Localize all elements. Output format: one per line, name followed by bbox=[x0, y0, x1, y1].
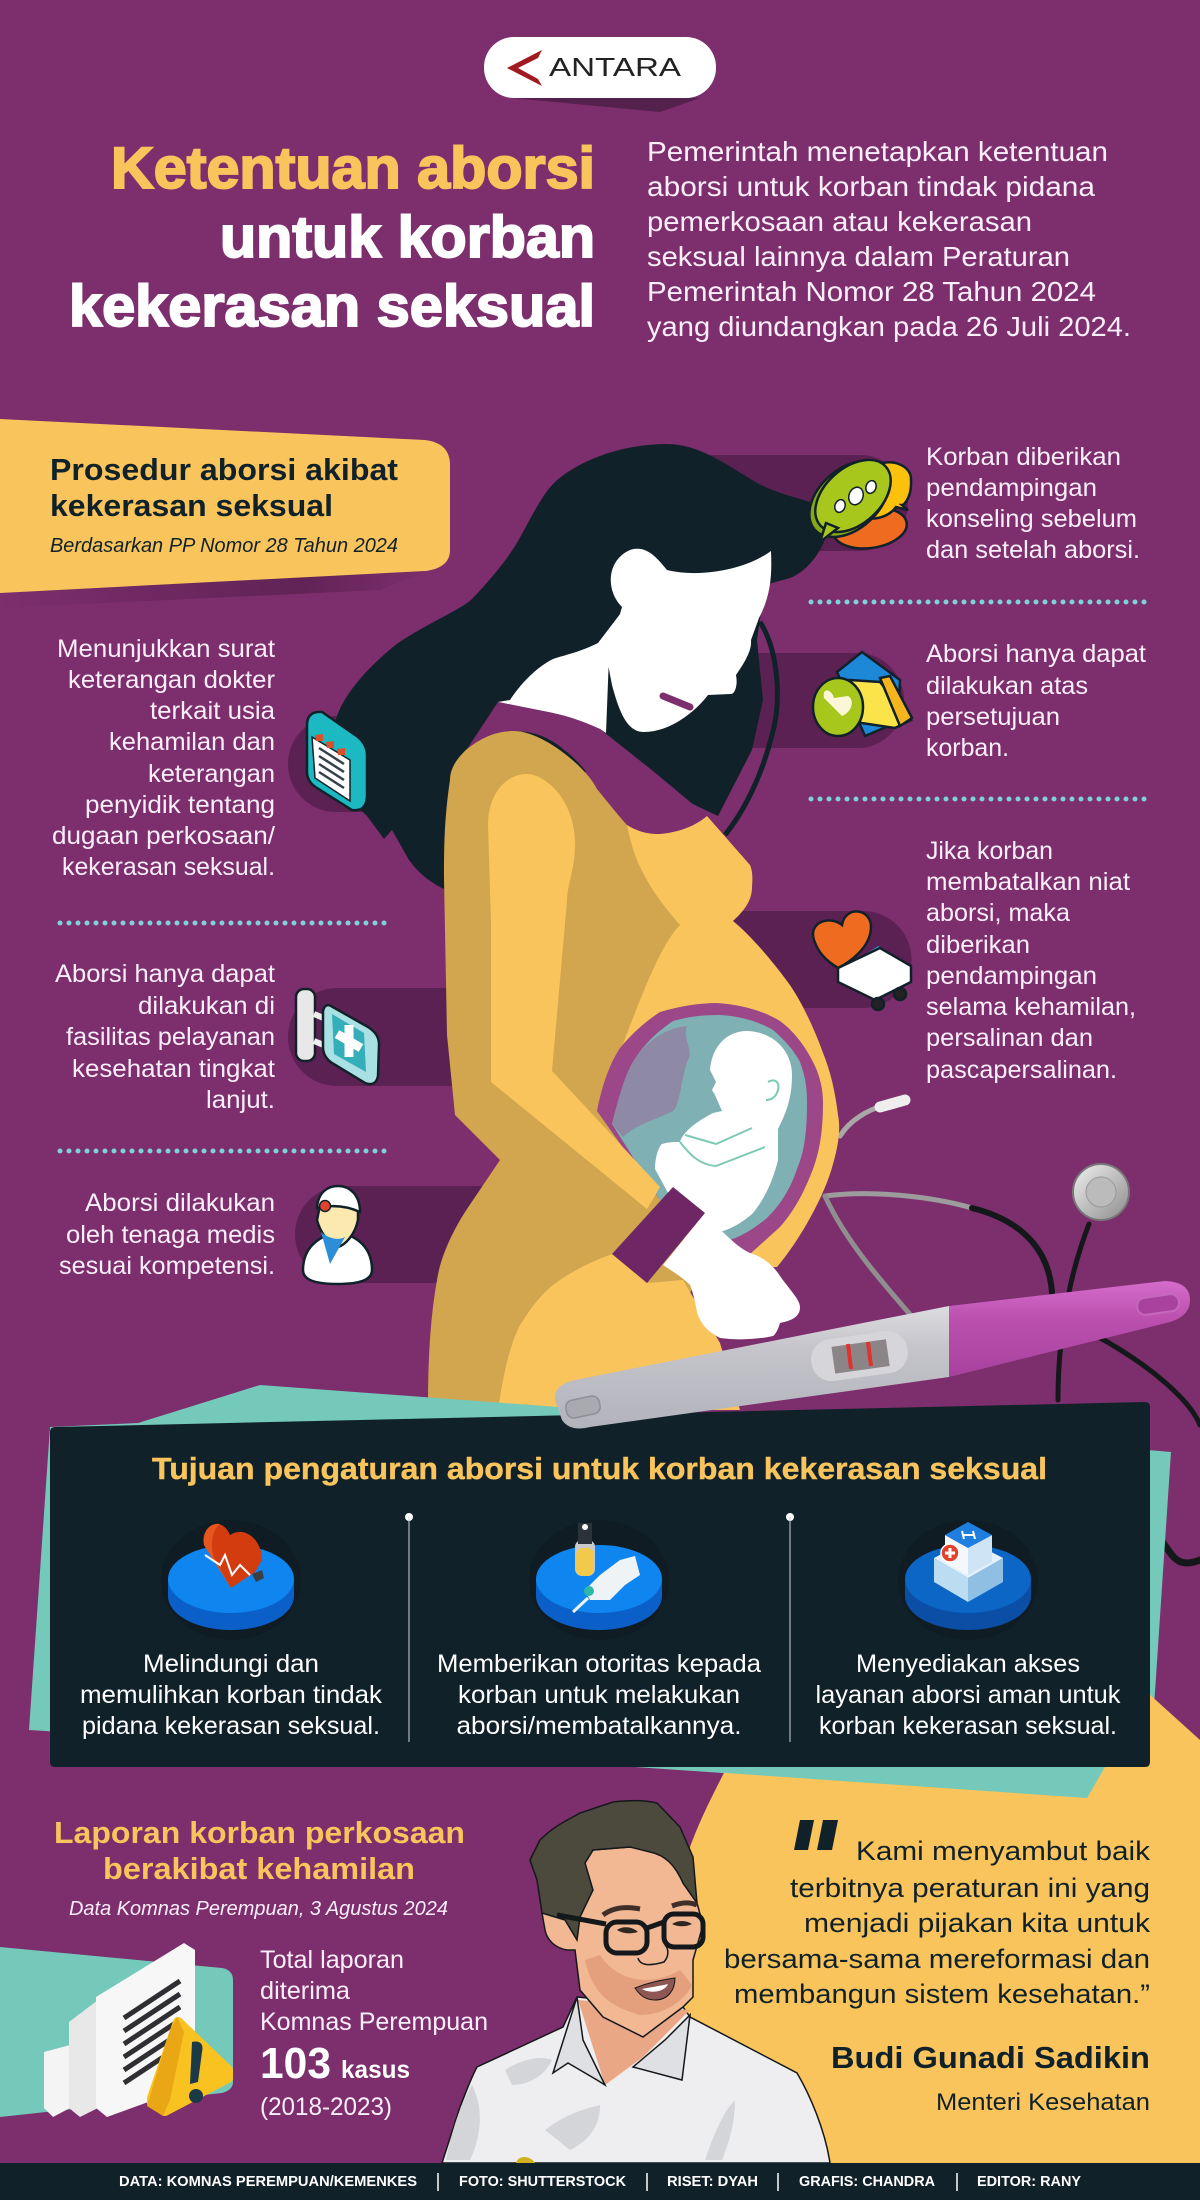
glasses bbox=[557, 1914, 703, 1953]
eyebrows bbox=[603, 1903, 697, 1915]
text: konseling: konseling sebelum bbox=[926, 505, 1137, 533]
text: konseling bbox=[926, 443, 1140, 564]
text: surat keterangan: keterangan bbox=[148, 760, 275, 788]
footer credits: FOTO: SHUTTERSTOCK bbox=[459, 2173, 626, 2190]
text: surat keterangan: kekerasan seksual. bbox=[62, 853, 275, 881]
text: tenaga medis: oleh tenaga medis bbox=[66, 1221, 275, 1249]
text: fasilitas kesehatan: Aborsi hanya dapat bbox=[55, 960, 275, 988]
goal text 3: korban kekerasan seksual. bbox=[819, 1712, 1117, 1740]
sac shade bbox=[612, 1026, 690, 1137]
stat: total reports: Total laporan bbox=[260, 1946, 404, 1974]
face bbox=[542, 1847, 703, 2037]
dress body bbox=[428, 731, 700, 1410]
stethoscope bbox=[825, 1100, 1200, 1563]
text: pendampingan kehamilan: persalinan dan bbox=[926, 1024, 1093, 1052]
text: surat keterangan: penyidik tentang bbox=[85, 791, 275, 819]
dress front light bbox=[612, 816, 839, 1270]
collar bbox=[553, 1997, 690, 2085]
cheek shading bbox=[585, 1955, 692, 2015]
panel: procedure heading: Berdasarkan PP Nomor 28 Tahun 2024 bbox=[50, 535, 398, 557]
text: pendampingan kehamilan: pendampingan bbox=[926, 962, 1097, 990]
stat: total reports bbox=[260, 1946, 488, 2121]
title: kekerasan seksual bbox=[69, 274, 595, 339]
mouth bbox=[635, 1978, 675, 2000]
stat: total reports: Komnas Perempuan bbox=[260, 2008, 488, 2036]
text: fasilitas kesehatan: fasilitas pelayanan bbox=[66, 1023, 275, 1051]
sleeve highlight bbox=[488, 774, 660, 1209]
goal text 2: aborsi/membatalkannya. bbox=[456, 1712, 742, 1740]
goal text 3: Menyediakan akses bbox=[856, 1650, 1080, 1678]
goal text 2: Memberikan otoritas kepada bbox=[437, 1650, 761, 1678]
text: konseling: dan setelah aborsi. bbox=[926, 536, 1140, 564]
neck bbox=[578, 2000, 690, 2085]
panel: left procedure list bbox=[52, 635, 390, 1284]
divider bbox=[811, 600, 1152, 604]
hair arc bbox=[725, 622, 777, 835]
quote: bersama-sama mereformasi dan bbox=[724, 1944, 1150, 1974]
quote: menjadi pijakan kita untuk bbox=[804, 1908, 1151, 1938]
icon: consent heart card bbox=[813, 652, 912, 736]
quote bbox=[724, 1820, 1151, 2116]
shirt shadows bbox=[446, 2058, 735, 2160]
text: fasilitas kesehatan: dilakukan di bbox=[138, 992, 275, 1020]
text: pendampingan kehamilan: selama kehamilan, bbox=[926, 993, 1136, 1021]
panel: procedure heading: kekerasan seksual bbox=[50, 488, 333, 523]
text: pendampingan kehamilan: diberikan bbox=[926, 931, 1030, 959]
hand bbox=[663, 1213, 800, 1339]
text: persetujuan: persetujuan bbox=[926, 703, 1060, 731]
intro paragraph: Pemerintah menetapkan ketentuan bbox=[647, 136, 1108, 167]
icon: heart on blue platform bbox=[161, 1520, 301, 1640]
divider 1 bbox=[405, 1513, 413, 1742]
quote: membangun sistem kesehatan.” bbox=[734, 1979, 1150, 2009]
icon: hospital on blue platform bbox=[898, 1520, 1038, 1640]
panel: right procedure list bbox=[795, 443, 1152, 1084]
intro paragraph bbox=[647, 136, 1131, 342]
stat: total reports: kasus bbox=[341, 2056, 410, 2084]
text: tenaga medis: sesuai kompetensi. bbox=[59, 1252, 275, 1280]
intro paragraph: yang diundangkan pada 26 Juli 2024. bbox=[647, 311, 1131, 342]
text: surat keterangan: dugaan perkosaan/ bbox=[52, 822, 275, 850]
goals heading: Tujuan pengaturan aborsi untuk korban kekerasan seksual bbox=[152, 1451, 1047, 1486]
portrait: minister bbox=[442, 1801, 830, 2163]
title: Ketentuan aborsi bbox=[111, 136, 595, 201]
icon: doctor bbox=[303, 1186, 372, 1284]
neck and chest bbox=[498, 605, 627, 733]
text: fasilitas kesehatan: kesehatan tingkat bbox=[72, 1055, 275, 1083]
goal text 1: Melindungi dan bbox=[143, 1650, 319, 1678]
text: konseling: pendampingan bbox=[926, 474, 1097, 502]
nose bbox=[638, 1945, 668, 1965]
quote: Menteri Kesehatan bbox=[936, 2089, 1150, 2116]
report heading: berakibat kehamilan bbox=[103, 1851, 415, 1886]
panel: procedure heading: Prosedur aborsi akibat bbox=[50, 452, 398, 487]
stat: total reports: 103 bbox=[260, 2039, 331, 2088]
hair fringe bbox=[655, 520, 771, 569]
icon: heart and bed bbox=[813, 911, 911, 1010]
icon: documents and warning bbox=[44, 1943, 228, 2117]
collar bbox=[467, 702, 707, 834]
text: persetujuan bbox=[926, 640, 1146, 762]
forearm shadow edge bbox=[552, 1071, 660, 1209]
eyes bbox=[617, 1921, 692, 1933]
quote: Budi Gunadi Sadikin bbox=[831, 2040, 1150, 2075]
amniotic sac bbox=[612, 1015, 807, 1242]
quotation mark bbox=[794, 1820, 838, 1850]
fetus bbox=[655, 1031, 792, 1233]
text: surat keterangan bbox=[52, 635, 275, 881]
intro paragraph: aborsi untuk korban tindak pidana bbox=[647, 171, 1095, 202]
woman illustration bbox=[334, 444, 839, 1410]
icon: chat bubbles bbox=[795, 446, 911, 553]
divider bbox=[60, 1148, 390, 1154]
intro paragraph: Pemerintah Nomor 28 Tahun 2024 bbox=[647, 276, 1096, 307]
text: surat keterangan: keterangan dokter bbox=[68, 666, 275, 694]
text: tenaga medis: Aborsi dilakukan bbox=[85, 1189, 275, 1217]
hair bbox=[530, 1801, 697, 1940]
quote: terbitnya peraturan ini yang bbox=[790, 1873, 1150, 1903]
womb bbox=[597, 1003, 823, 1254]
stat: total reports: (2018-2023) bbox=[260, 2093, 392, 2121]
text: pendampingan kehamilan: aborsi, maka bbox=[926, 899, 1070, 927]
goal text 1: memulihkan korban tindak bbox=[80, 1681, 383, 1709]
icon: medical sign bbox=[296, 989, 379, 1084]
text: konseling: Korban diberikan bbox=[926, 443, 1121, 471]
goal text 3 bbox=[816, 1650, 1121, 1740]
text: persetujuan: korban. bbox=[926, 734, 1009, 762]
hair bbox=[334, 444, 830, 889]
dark goals panel bbox=[50, 1402, 1150, 1767]
text: fasilitas kesehatan bbox=[55, 960, 275, 1114]
text: pendampingan kehamilan: Jika korban bbox=[926, 837, 1053, 865]
teal back panel bbox=[29, 1385, 1171, 1798]
pregnancy test bbox=[555, 1281, 1190, 1428]
logo: ANTARA: ANTARA bbox=[549, 52, 682, 82]
text: fasilitas kesehatan: lanjut. bbox=[206, 1086, 275, 1114]
report heading: Laporan korban perkosaan bbox=[54, 1815, 465, 1850]
icon shadow bars bbox=[288, 455, 911, 1283]
divider bbox=[60, 920, 390, 926]
goal text 2: korban untuk melakukan bbox=[458, 1681, 740, 1709]
title: untuk korban bbox=[220, 205, 595, 270]
text: pendampingan kehamilan: pascapersalinan. bbox=[926, 1056, 1117, 1084]
title bbox=[69, 136, 595, 339]
lower belly light bbox=[498, 1254, 740, 1410]
footer credits: DATA: KOMNAS PEREMPUAN/KEMENKES bbox=[119, 2173, 417, 2190]
text: surat keterangan: kehamilan dan bbox=[109, 728, 275, 756]
stat: total reports: diterima bbox=[260, 1977, 350, 2005]
footer credits bbox=[0, 2163, 1200, 2200]
teal report backdrop bbox=[0, 1947, 233, 2117]
goal text 3: layanan aborsi aman untuk bbox=[816, 1681, 1121, 1709]
text: surat keterangan: terkait usia bbox=[150, 697, 275, 725]
panel: procedure heading bbox=[0, 419, 450, 608]
text: tenaga medis bbox=[59, 1189, 275, 1280]
quote: Kami menyambut baik bbox=[856, 1836, 1151, 1866]
yellow quote background bbox=[660, 1693, 1200, 2163]
goal text 1: pidana kekerasan seksual. bbox=[82, 1712, 380, 1740]
goal text 1 bbox=[80, 1650, 383, 1740]
report heading bbox=[54, 1815, 465, 1920]
divider 2 bbox=[786, 1513, 794, 1742]
footer credits: GRAFIS: CHANDRA bbox=[799, 2173, 935, 2190]
logo: ANTARA bbox=[484, 37, 716, 112]
icon: document bbox=[307, 712, 367, 810]
text: persetujuan: Aborsi hanya dapat bbox=[926, 640, 1146, 668]
footer credits: RISET: DYAH bbox=[667, 2173, 758, 2190]
report heading: Data Komnas Perempuan, 3 Agustus 2024 bbox=[69, 1898, 448, 1920]
mouth bbox=[663, 696, 690, 707]
text: pendampingan kehamilan: membatalkan niat bbox=[926, 868, 1130, 896]
divider bbox=[811, 796, 1152, 802]
text: surat keterangan: Menunjukkan surat bbox=[57, 635, 275, 663]
text: persetujuan: dilakukan atas bbox=[926, 672, 1088, 700]
wristband bbox=[612, 1187, 705, 1283]
icon: vial and syringe on blue platform bbox=[529, 1520, 669, 1640]
shirt bbox=[442, 1997, 830, 2163]
footer credits: EDITOR: RANY bbox=[977, 2173, 1081, 2190]
intro paragraph: pemerkosaan atau kekerasan bbox=[647, 206, 1032, 237]
intro paragraph: seksual lainnya dalam Peraturan bbox=[647, 241, 1070, 272]
text: pendampingan kehamilan bbox=[926, 837, 1136, 1084]
goal text 2 bbox=[437, 1650, 761, 1740]
badge bbox=[516, 2157, 535, 2163]
face bbox=[607, 549, 771, 732]
